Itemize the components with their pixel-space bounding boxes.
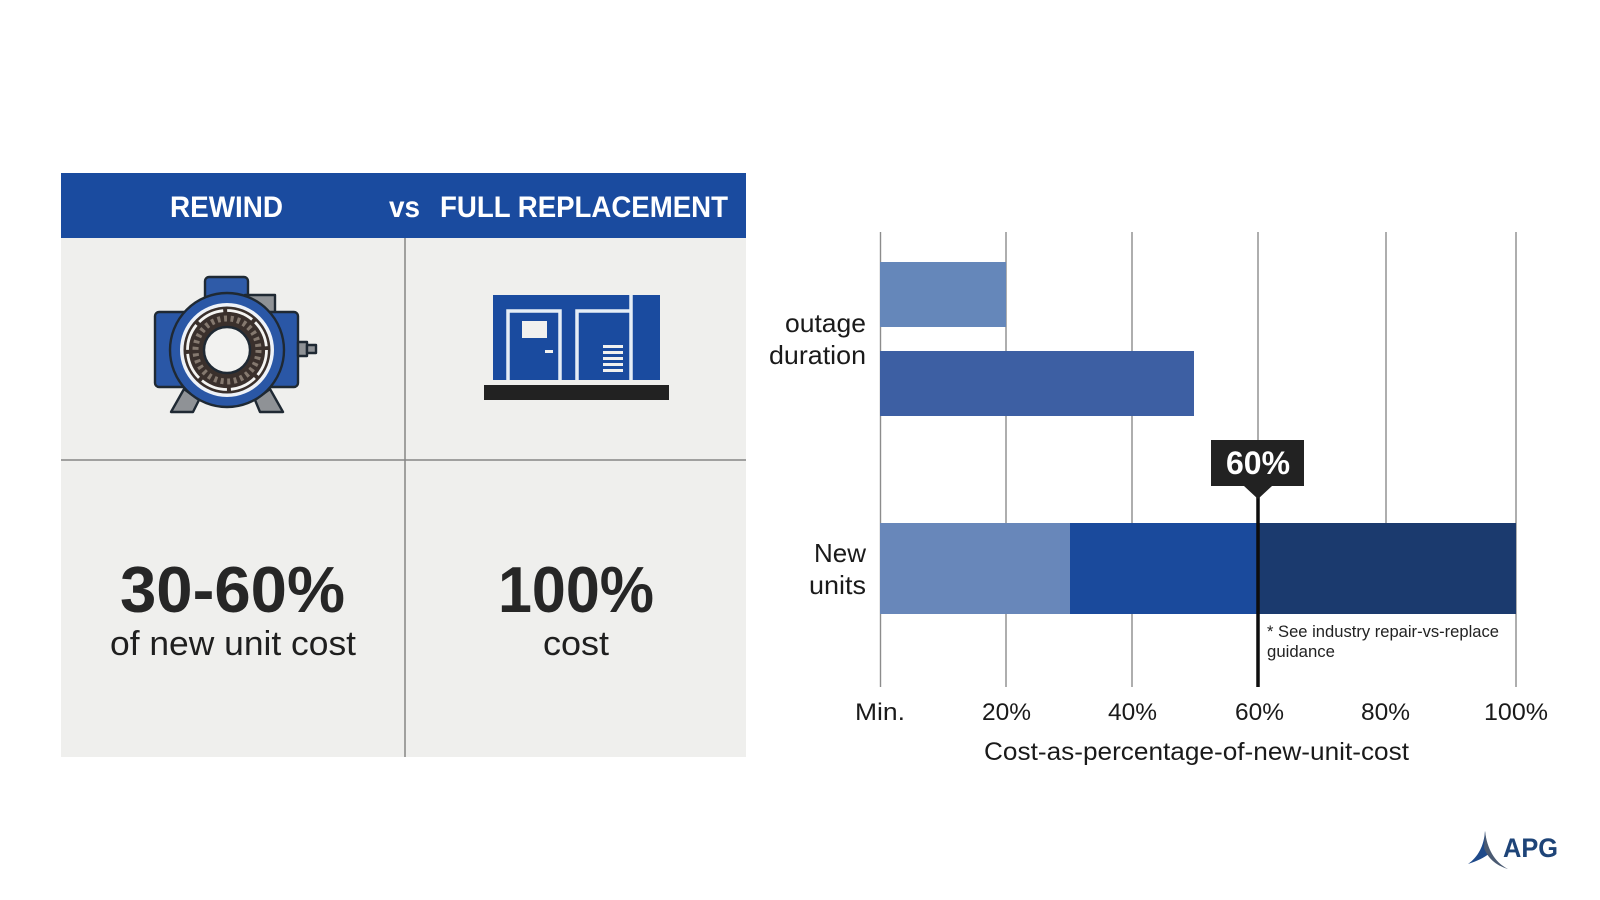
axis tick labels: 60% — [1235, 699, 1284, 726]
panel background — [61, 173, 746, 757]
axis tick labels: 100% — [1484, 699, 1548, 726]
heading: full replacement: FULL REPLACEMENT — [440, 191, 728, 224]
axis tick labels: 80% — [1361, 699, 1410, 726]
label: outage duration — [769, 308, 866, 370]
caption: cost: cost — [543, 625, 610, 663]
axis tick labels: Min. — [855, 699, 905, 726]
footnote: * See industry repair-vs-replace — [1267, 622, 1499, 641]
label: new units — [809, 538, 866, 600]
stat: replacement cost: 100% — [498, 553, 654, 626]
stat: rewind cost: 30-60% — [120, 553, 345, 626]
stat: replacement cost — [498, 553, 654, 663]
bar: outage duration rewind — [880, 262, 1006, 327]
icon: generator enclosure — [484, 295, 669, 400]
label: outage duration: outage — [785, 308, 866, 338]
header bar — [61, 173, 746, 238]
bar: outage duration replacement — [880, 351, 1194, 416]
caption: of new unit cost: of new unit cost — [110, 625, 357, 663]
axis title: Cost-as-percentage-of-new-unit-cost — [984, 738, 1409, 766]
callout: 60% — [1211, 440, 1304, 499]
footnote: guidance — [1267, 642, 1335, 661]
heading: rewind: REWIND — [170, 191, 283, 224]
callout: 60%: 60% — [1226, 445, 1290, 481]
logo: APG: APG — [1503, 833, 1558, 863]
axis tick labels: 20% — [982, 699, 1031, 726]
marker: 60% line — [1256, 490, 1260, 687]
chart: cost as percentage of new unit cost — [769, 232, 1548, 766]
icon: motor stator — [155, 277, 316, 412]
bar: new units stacked — [880, 523, 1516, 614]
label: new units: units — [809, 570, 866, 600]
stat: rewind cost — [110, 553, 357, 663]
heading: vs: vs — [389, 191, 420, 224]
axis tick labels: 40% — [1108, 699, 1157, 726]
label: new units: New — [814, 538, 866, 568]
axis tick labels — [855, 699, 1548, 726]
label: outage duration: duration — [769, 340, 866, 370]
footnote — [1267, 622, 1499, 661]
logo: APG — [1468, 831, 1558, 869]
panel: rewind vs full replacement comparison — [61, 173, 746, 757]
